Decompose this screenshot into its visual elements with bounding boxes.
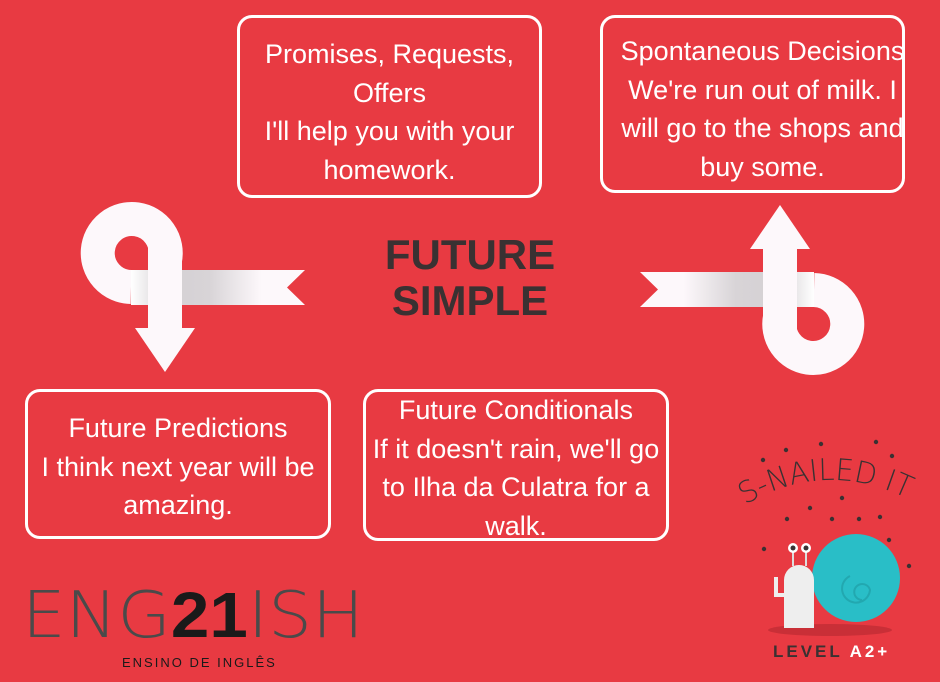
box: future predictions: amazing. [123,490,233,520]
arrow: right loop up [640,205,847,358]
box: promises: I'll help you with your [265,116,514,146]
box: spontaneous decisions: will go to the shops and [621,113,904,143]
title: SIMPLE [392,277,548,324]
title [385,231,555,324]
box: future conditionals: If it doesn't rain, we'll go [373,434,659,464]
box: promises: Offers [353,78,426,108]
box: promises: Promises, Requests, [265,39,514,69]
box: future conditionals: walk. [485,510,547,540]
box: future predictions [25,389,331,539]
box: promises: homework. [323,154,456,184]
logo: snailed it [738,440,916,661]
logo: eng21ish: ENG21ISH [22,579,364,653]
logo: snailed it: LEVEL A2+ [773,642,890,661]
logo: snailed it: S-NAILED IT [738,458,916,502]
box: future conditionals: Future Conditionals [399,395,633,425]
box: future predictions: I think next year will be [41,452,315,482]
box: future conditionals [363,389,669,541]
arrow: left loop down [98,219,305,372]
box: promises [237,15,542,198]
box: spontaneous decisions: Spontaneous Decisions [621,36,904,66]
logo: eng21ish: ENSINO DE INGLÊS [122,655,277,670]
box: spontaneous decisions: buy some. [700,152,825,182]
title: FUTURE [385,231,555,278]
box: spontaneous decisions: We're run out of milk. I [628,74,897,104]
box: future predictions: Future Predictions [68,413,288,443]
box: spontaneous decisions [600,15,905,193]
box: future conditionals: to Ilha da Culatra for a [382,472,650,502]
